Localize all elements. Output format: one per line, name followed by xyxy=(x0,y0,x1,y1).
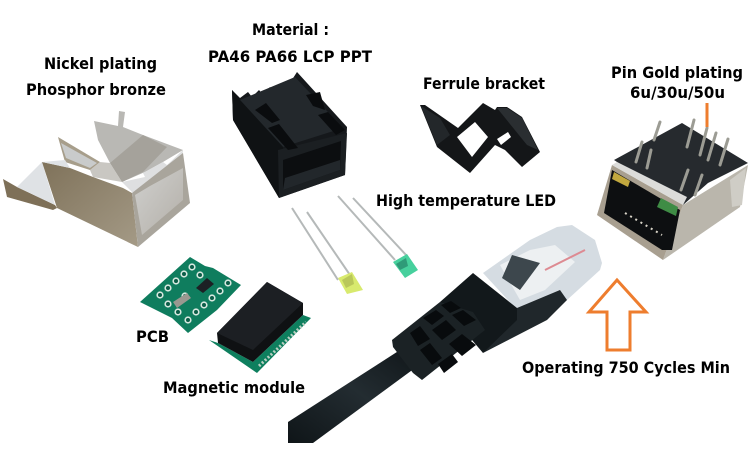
side wall xyxy=(42,162,138,247)
strain relief boot xyxy=(392,302,485,380)
label: PCB: PCB xyxy=(136,327,169,346)
icon: metal shield xyxy=(3,111,190,247)
front frame xyxy=(132,153,190,247)
arrow: orange up arrow xyxy=(589,280,646,350)
label: high temperature LED: High temperature LED xyxy=(376,191,556,210)
label: ferrule bracket: Ferrule bracket xyxy=(423,74,545,93)
heading: material xyxy=(208,20,372,66)
icon: yellow LED xyxy=(292,208,363,294)
gold pins xyxy=(636,120,728,195)
icon: patch cable xyxy=(288,225,602,443)
icon: magnetic module xyxy=(209,282,311,373)
icon: PCB xyxy=(140,257,241,333)
icon: ferrule bracket xyxy=(420,103,540,173)
label: operating cycles: Operating 750 Cycles Min xyxy=(522,358,730,377)
label: pin gold plating xyxy=(611,63,743,102)
back wall xyxy=(94,111,183,182)
heading: material: PA46 PA66 LCP PPT xyxy=(208,47,372,66)
upright tab xyxy=(58,137,100,170)
transparent plug xyxy=(483,225,602,310)
heading: shield plating xyxy=(26,54,166,99)
icon: RJ45 jack xyxy=(597,120,748,260)
hood xyxy=(483,290,567,353)
label: pin gold plating: 6u/30u/50u xyxy=(630,83,725,102)
heading: shield plating: Nickel plating xyxy=(44,54,157,73)
cable xyxy=(288,350,415,443)
heading: material: Material : xyxy=(252,20,329,39)
icon: black jack housing xyxy=(232,72,347,198)
callout line: pin xyxy=(706,103,708,127)
heading: shield plating: Phosphor bronze xyxy=(26,80,166,99)
label: magnetic module: Magnetic module xyxy=(163,378,305,397)
icon: green LED xyxy=(338,196,418,278)
left flap xyxy=(3,179,57,210)
top strip xyxy=(122,150,183,193)
